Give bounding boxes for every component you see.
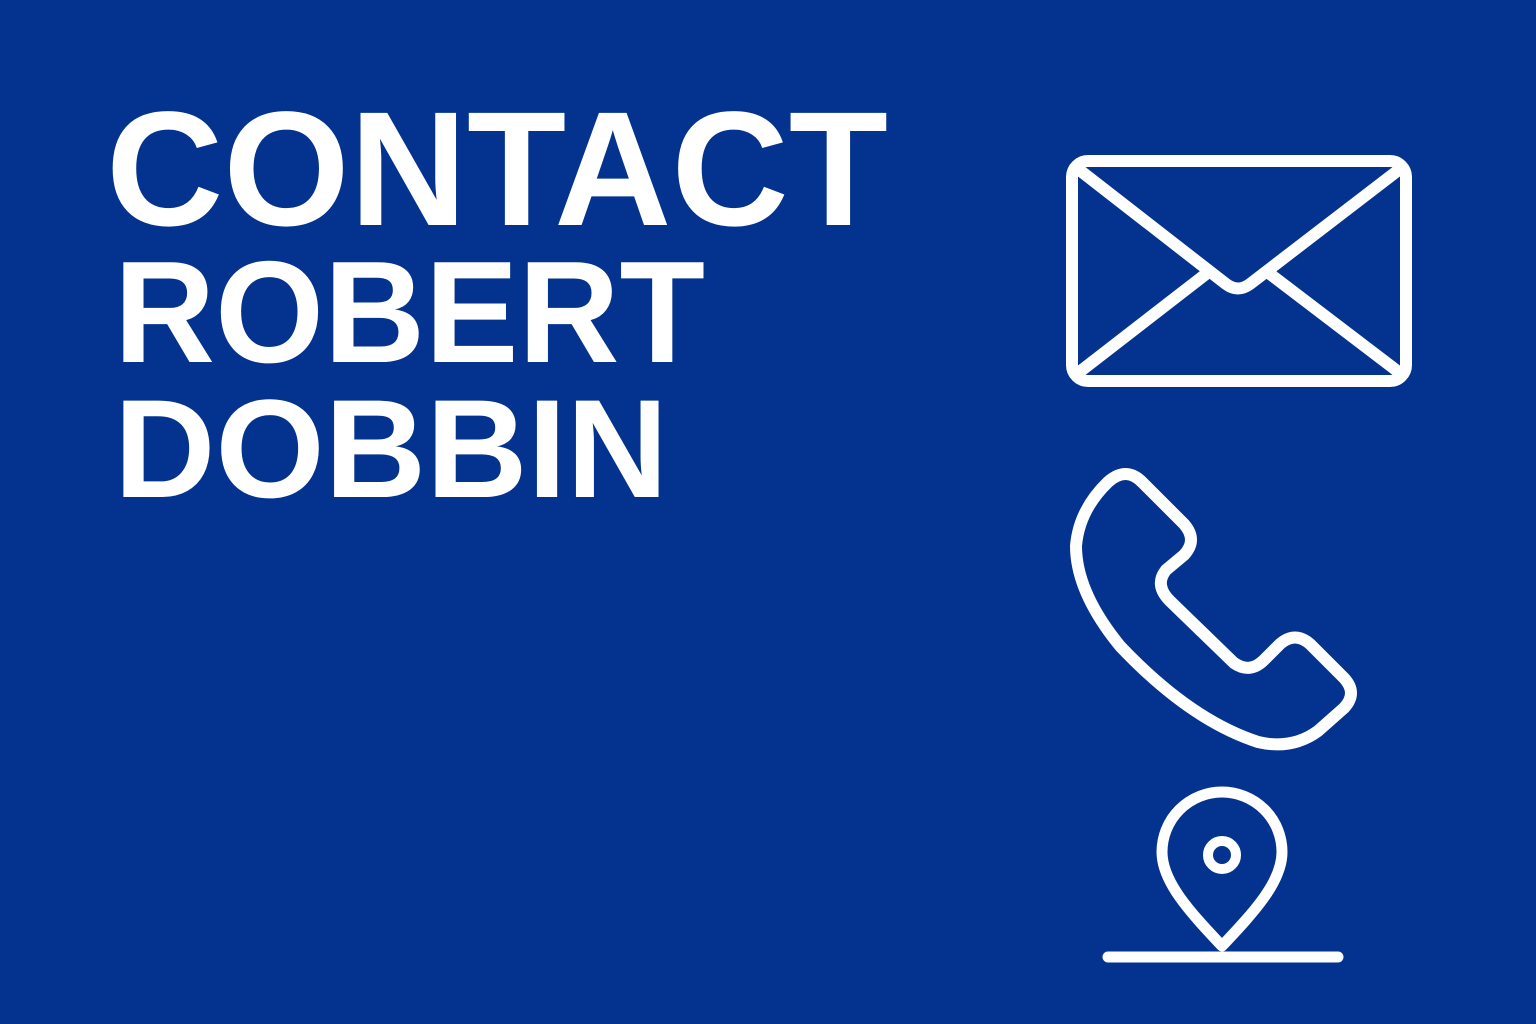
- title: contact robert dobbin: CONTACT: [106, 77, 888, 260]
- title: contact robert dobbin: DOBBIN: [114, 370, 668, 527]
- icon: envelope: [1072, 161, 1406, 381]
- icon: location pin: [1108, 792, 1338, 957]
- title: contact robert dobbin: ROBERT: [114, 231, 705, 393]
- icon: phone: [1076, 474, 1351, 744]
